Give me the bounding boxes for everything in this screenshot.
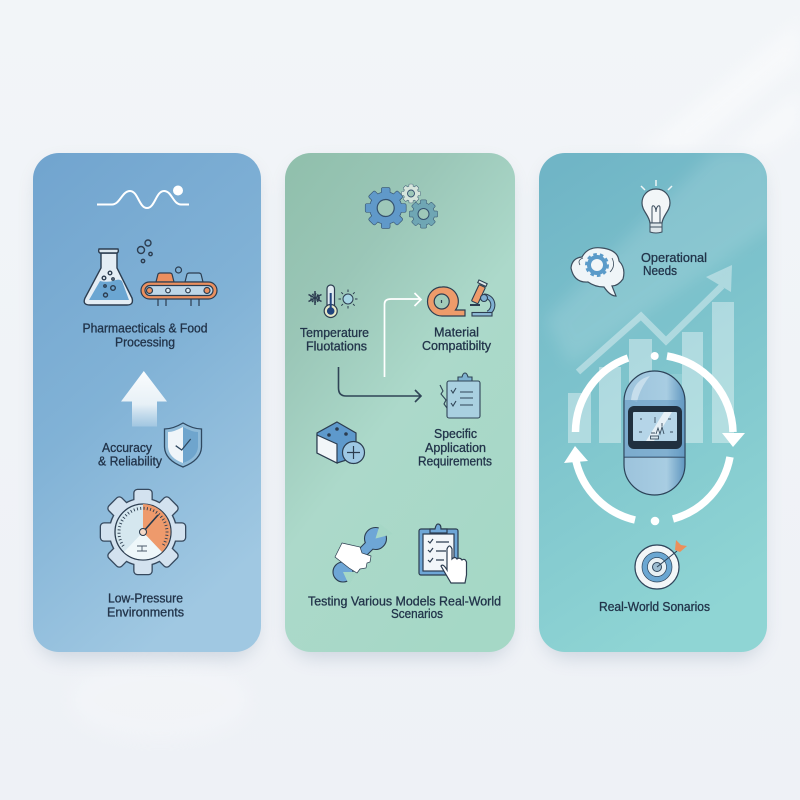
text: temperature label [300,325,369,354]
icon: microscope [470,280,493,316]
arrow: white elbow to material compatibility [384,293,421,377]
icon: wave and dot [97,186,189,208]
icon: pressure gauge gear [101,490,185,574]
icon: flask with bubbles [84,240,152,305]
text: low-pressure label [107,590,184,620]
text: temperature label: Fluotations [306,338,367,354]
panel: operational needs and real-world scenarios [539,150,775,658]
text: application requirements label: Requirements [418,454,492,468]
icon: snowflake, thermometer and sun [308,285,358,318]
text: material compatibility label [422,324,492,353]
icon: circular white arrows [564,352,745,525]
text: testing label: Scenarios [391,606,443,621]
text: low-pressure label: Environments [107,604,184,620]
text: low-pressure label: Low-Pressure [108,590,183,606]
panel: pharmaceuticals, accuracy and low pressure [33,153,261,658]
text: temperature label: Temperature [300,325,369,340]
icon: brain with gear [571,248,624,296]
icon: three gears [366,184,437,228]
text: accuracy label: Accuracy [102,440,153,455]
text: operational needs label: Operational [641,250,707,265]
text: material compatibility label: Material [434,324,479,340]
text: pharmaceuticals label: Pharmaecticals & Food [82,320,208,336]
text: pharmaceuticals label [82,320,208,350]
text: real-world scenarios label: Real-World Sonarios [599,599,710,614]
text: accuracy label: & Reliability [98,454,163,468]
text: testing label: Testing Various Models Real-World [308,594,501,608]
arrow: dark elbow to application requirements [338,367,421,402]
icon: cube with plus [317,422,364,464]
arrow: white upward [121,371,167,426]
chart: rising bars with trend arrow [568,265,734,443]
text: application requirements label [418,426,492,468]
icon: tape measure [428,287,465,316]
icon: target with arrow [635,540,687,589]
text: material compatibility label: Compatibilty [422,338,492,353]
icon: shield [164,423,202,467]
panel: requirements and testing [285,153,515,658]
icon: hand holding wrench [333,524,393,585]
icon: checklist clipboard [440,373,480,418]
icon: capsule device [624,371,685,495]
icon: conveyor belt [141,267,217,306]
text: application requirements label: Application [425,440,486,455]
icon: light bulb [641,180,672,233]
text: operational needs label [641,250,707,278]
text: operational needs label: Needs [643,263,677,278]
text: application requirements label: Specific [434,426,478,441]
text: testing label [308,594,501,621]
text: accuracy label [98,440,163,468]
text: pharmaceuticals label: Processing [115,334,175,350]
icon: clipboard with pointing hand [419,524,466,583]
